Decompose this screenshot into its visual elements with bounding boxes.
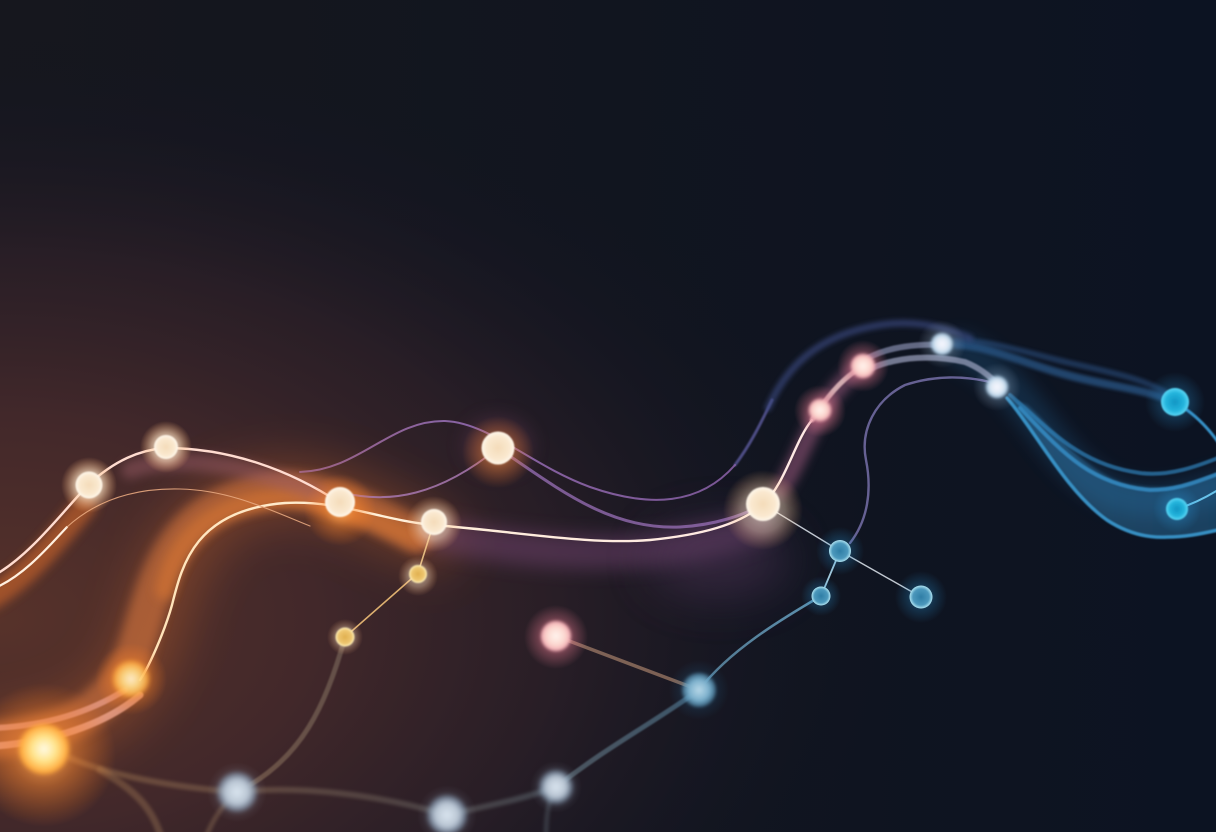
blue ribbon band	[735, 323, 1216, 537]
nodes: pink cluster	[462, 340, 889, 669]
nodes: warm cluster	[61, 421, 462, 715]
purple and blue flow lines	[300, 345, 1216, 543]
node: large orange hot spot	[0, 683, 116, 827]
thin branch connectors	[345, 504, 921, 690]
lower network connections	[70, 596, 821, 832]
nodes: pale lower cluster	[207, 761, 582, 832]
orange to purple glow band	[0, 368, 860, 745]
main bright flow line	[0, 368, 860, 746]
nodes: blue cluster	[669, 320, 1205, 720]
